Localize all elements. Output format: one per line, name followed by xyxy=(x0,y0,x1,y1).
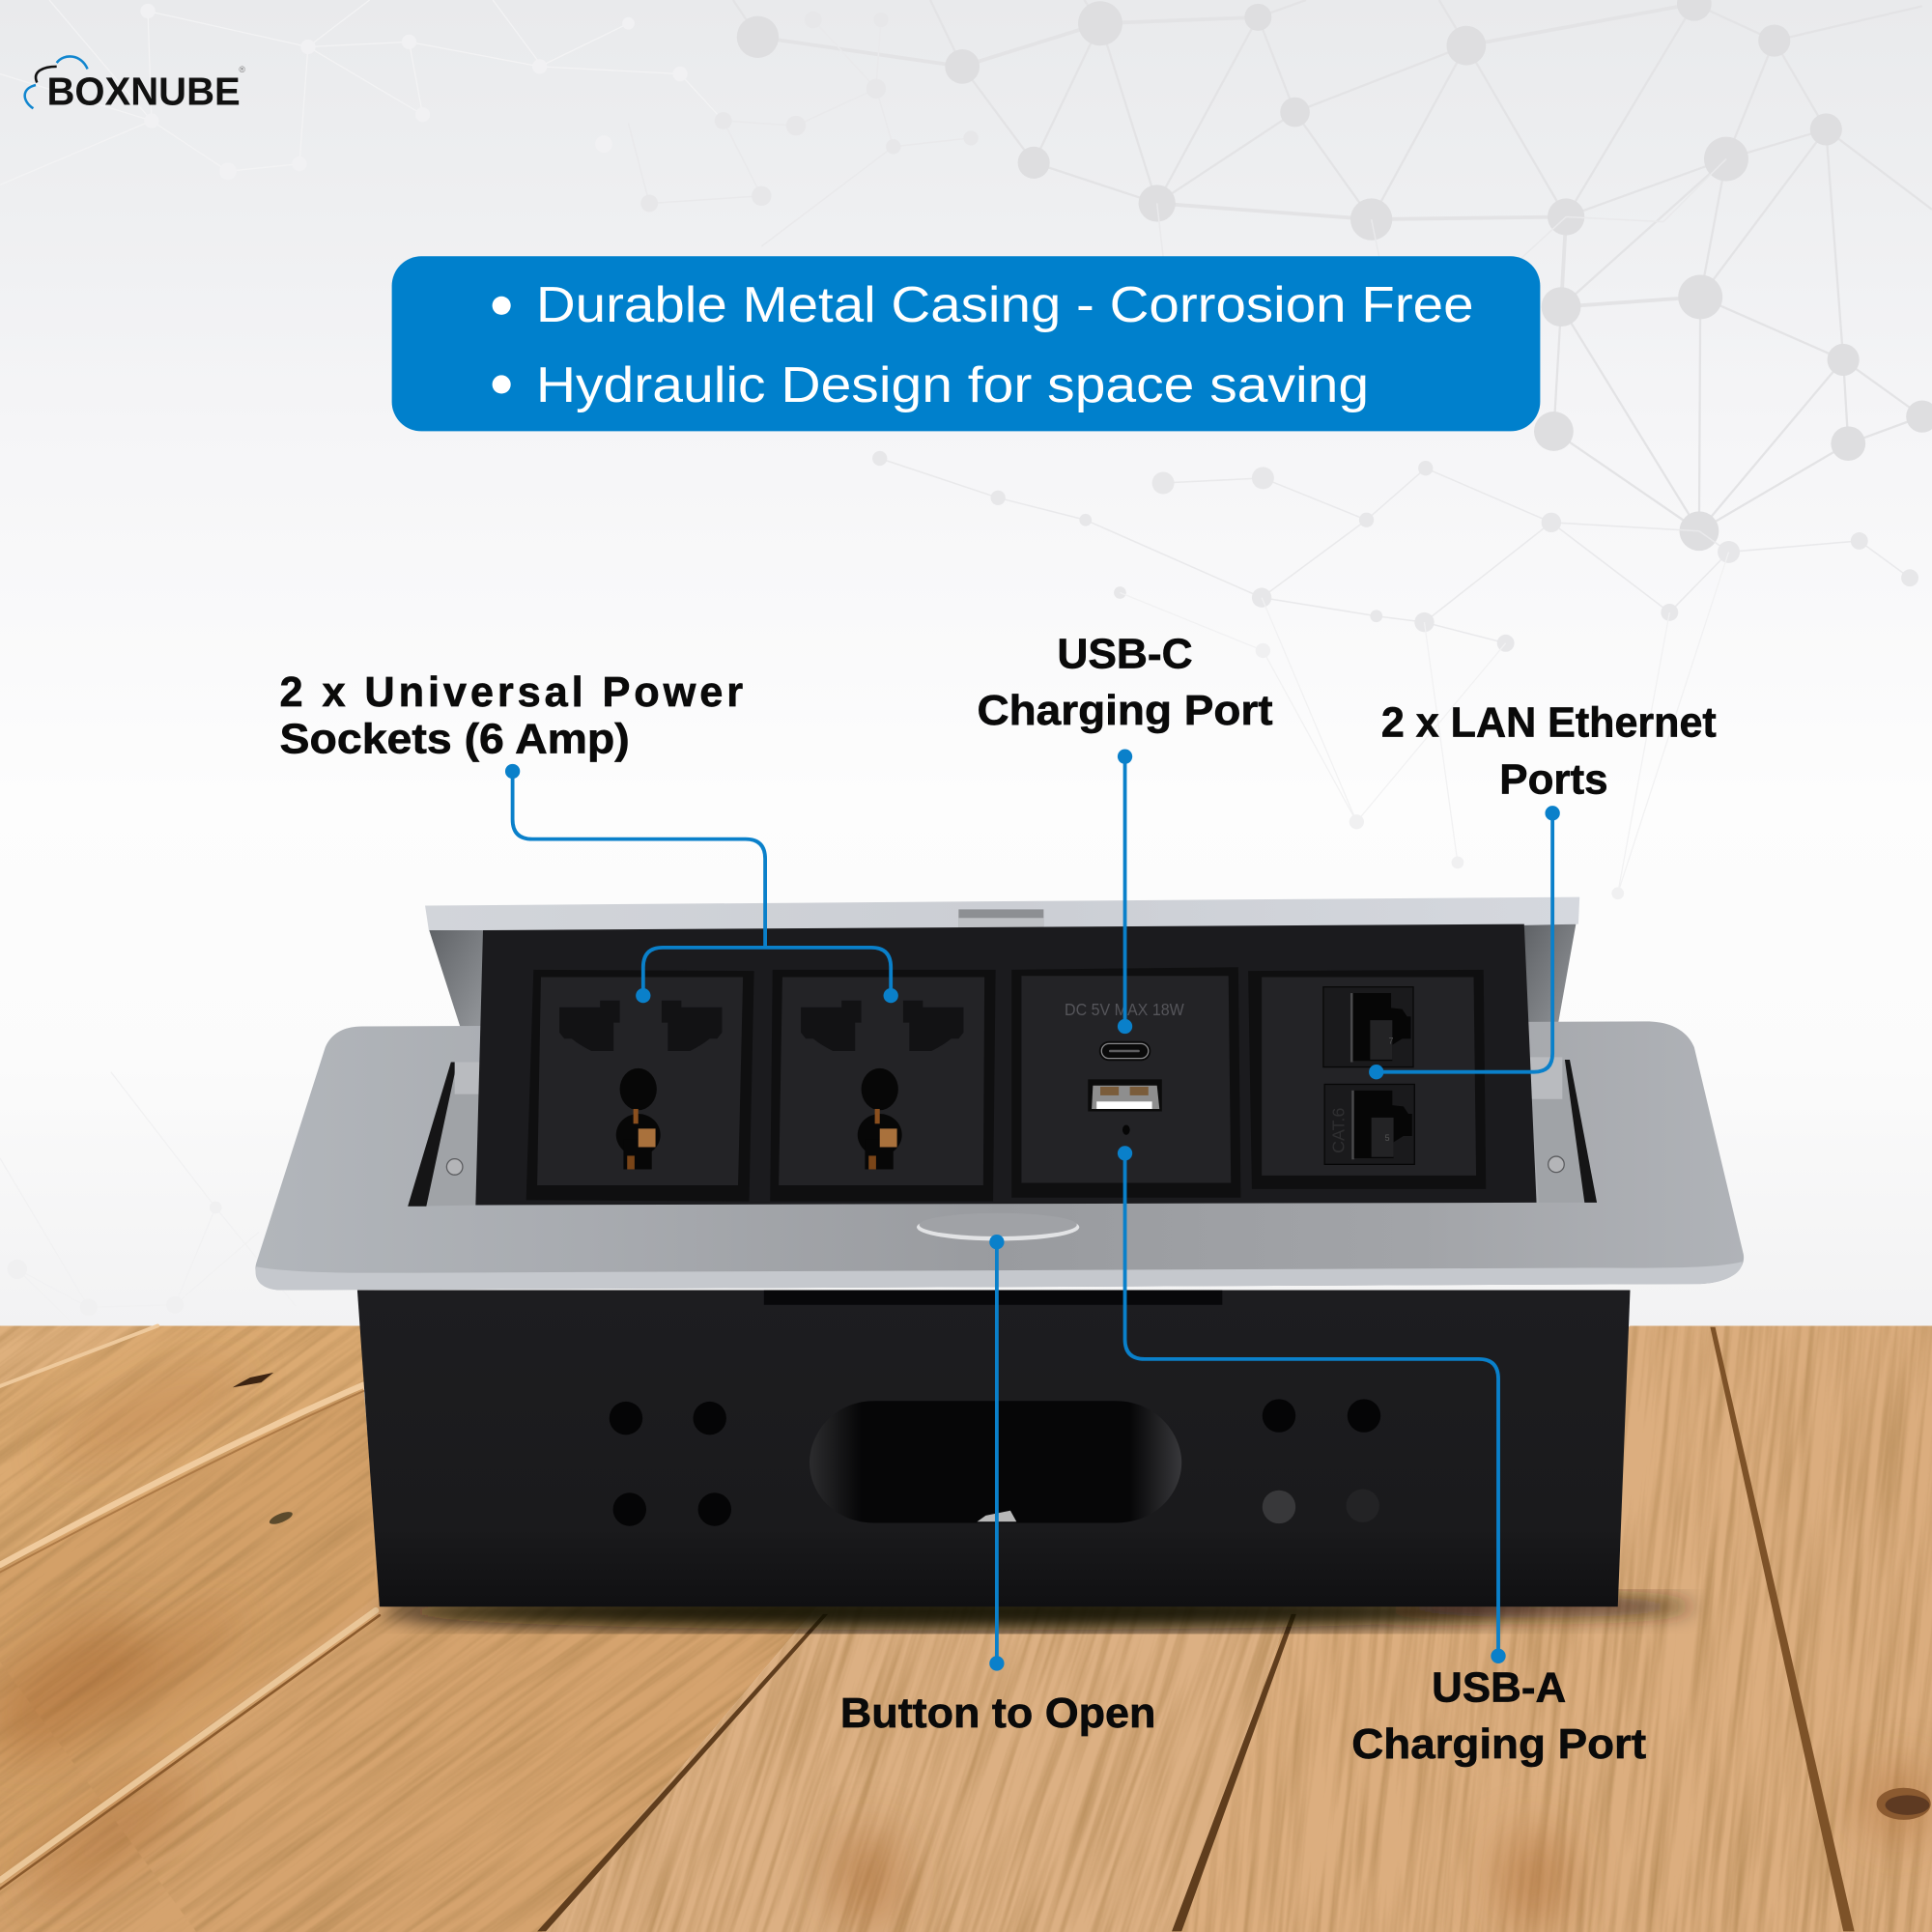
right rail xyxy=(1528,1057,1597,1203)
connector: button xyxy=(989,1235,1005,1671)
connector: power sockets xyxy=(505,764,898,1003)
wooden floor xyxy=(0,1325,1932,1932)
logo xyxy=(25,56,245,113)
logo: ® xyxy=(239,65,245,74)
wood grain: left planks xyxy=(0,1325,826,1932)
label: LAN: 2 x LAN Ethernet xyxy=(1381,700,1717,747)
product xyxy=(255,897,1744,1606)
LAN module xyxy=(1248,970,1486,1189)
background xyxy=(0,0,1932,1331)
socket module 1 xyxy=(526,970,754,1202)
LAN port 1: 7 xyxy=(1389,1036,1393,1045)
LAN port 2: CAT.6 xyxy=(1329,1108,1349,1153)
USB module xyxy=(1011,967,1240,1198)
label: USB-A: USB-A xyxy=(1432,1664,1566,1711)
label: USB-C xyxy=(977,631,1273,734)
wood grain: right planks xyxy=(1177,1325,1932,1932)
LAN port 2: 5 xyxy=(1385,1133,1390,1143)
connector: USB-C xyxy=(1118,750,1132,1034)
left rail xyxy=(408,1062,483,1207)
label: power sockets: 2 x Universal Power xyxy=(280,669,743,716)
label: button: Button to Open xyxy=(840,1690,1155,1737)
logo: BOXNUBE xyxy=(46,69,241,113)
LED xyxy=(1122,1125,1130,1135)
network pattern background xyxy=(0,0,1932,1324)
label: LAN: Ports xyxy=(1499,756,1608,803)
LAN port 1 xyxy=(1323,987,1413,1067)
wood grain: middle plank xyxy=(542,1597,1293,1932)
contact shadow xyxy=(382,1593,1694,1631)
feature 1: Durable Metal Casing - Corrosion Free xyxy=(536,277,1474,333)
label: USB-A xyxy=(1351,1664,1646,1768)
knot xyxy=(1877,1788,1931,1820)
lower black box xyxy=(357,1290,1631,1606)
tilted lid xyxy=(425,897,1579,1029)
label: LAN xyxy=(1381,700,1717,803)
LAN port 2 xyxy=(1324,1084,1414,1164)
USB-A port xyxy=(1088,1079,1162,1112)
feature 2: Hydraulic Design for space saving xyxy=(536,357,1369,413)
feature banner xyxy=(392,256,1540,431)
label: power sockets xyxy=(280,669,743,762)
top plate xyxy=(255,1021,1744,1290)
plank seams xyxy=(537,1327,1855,1931)
socket module 2 xyxy=(770,970,996,1202)
label: USB-C: Charging Port xyxy=(977,688,1273,734)
label: USB-C: USB-C xyxy=(1057,631,1193,677)
connector: LAN xyxy=(1369,806,1560,1079)
connector: USB-A xyxy=(1118,1146,1506,1663)
rating text: DC 5V MAX 18W xyxy=(1065,1000,1184,1019)
label: power sockets: Sockets (6 Amp) xyxy=(280,716,630,762)
USB-C port xyxy=(1099,1041,1151,1061)
label: USB-A: Charging Port xyxy=(1351,1721,1646,1768)
black front panel xyxy=(475,924,1537,1205)
button xyxy=(917,1213,1079,1240)
